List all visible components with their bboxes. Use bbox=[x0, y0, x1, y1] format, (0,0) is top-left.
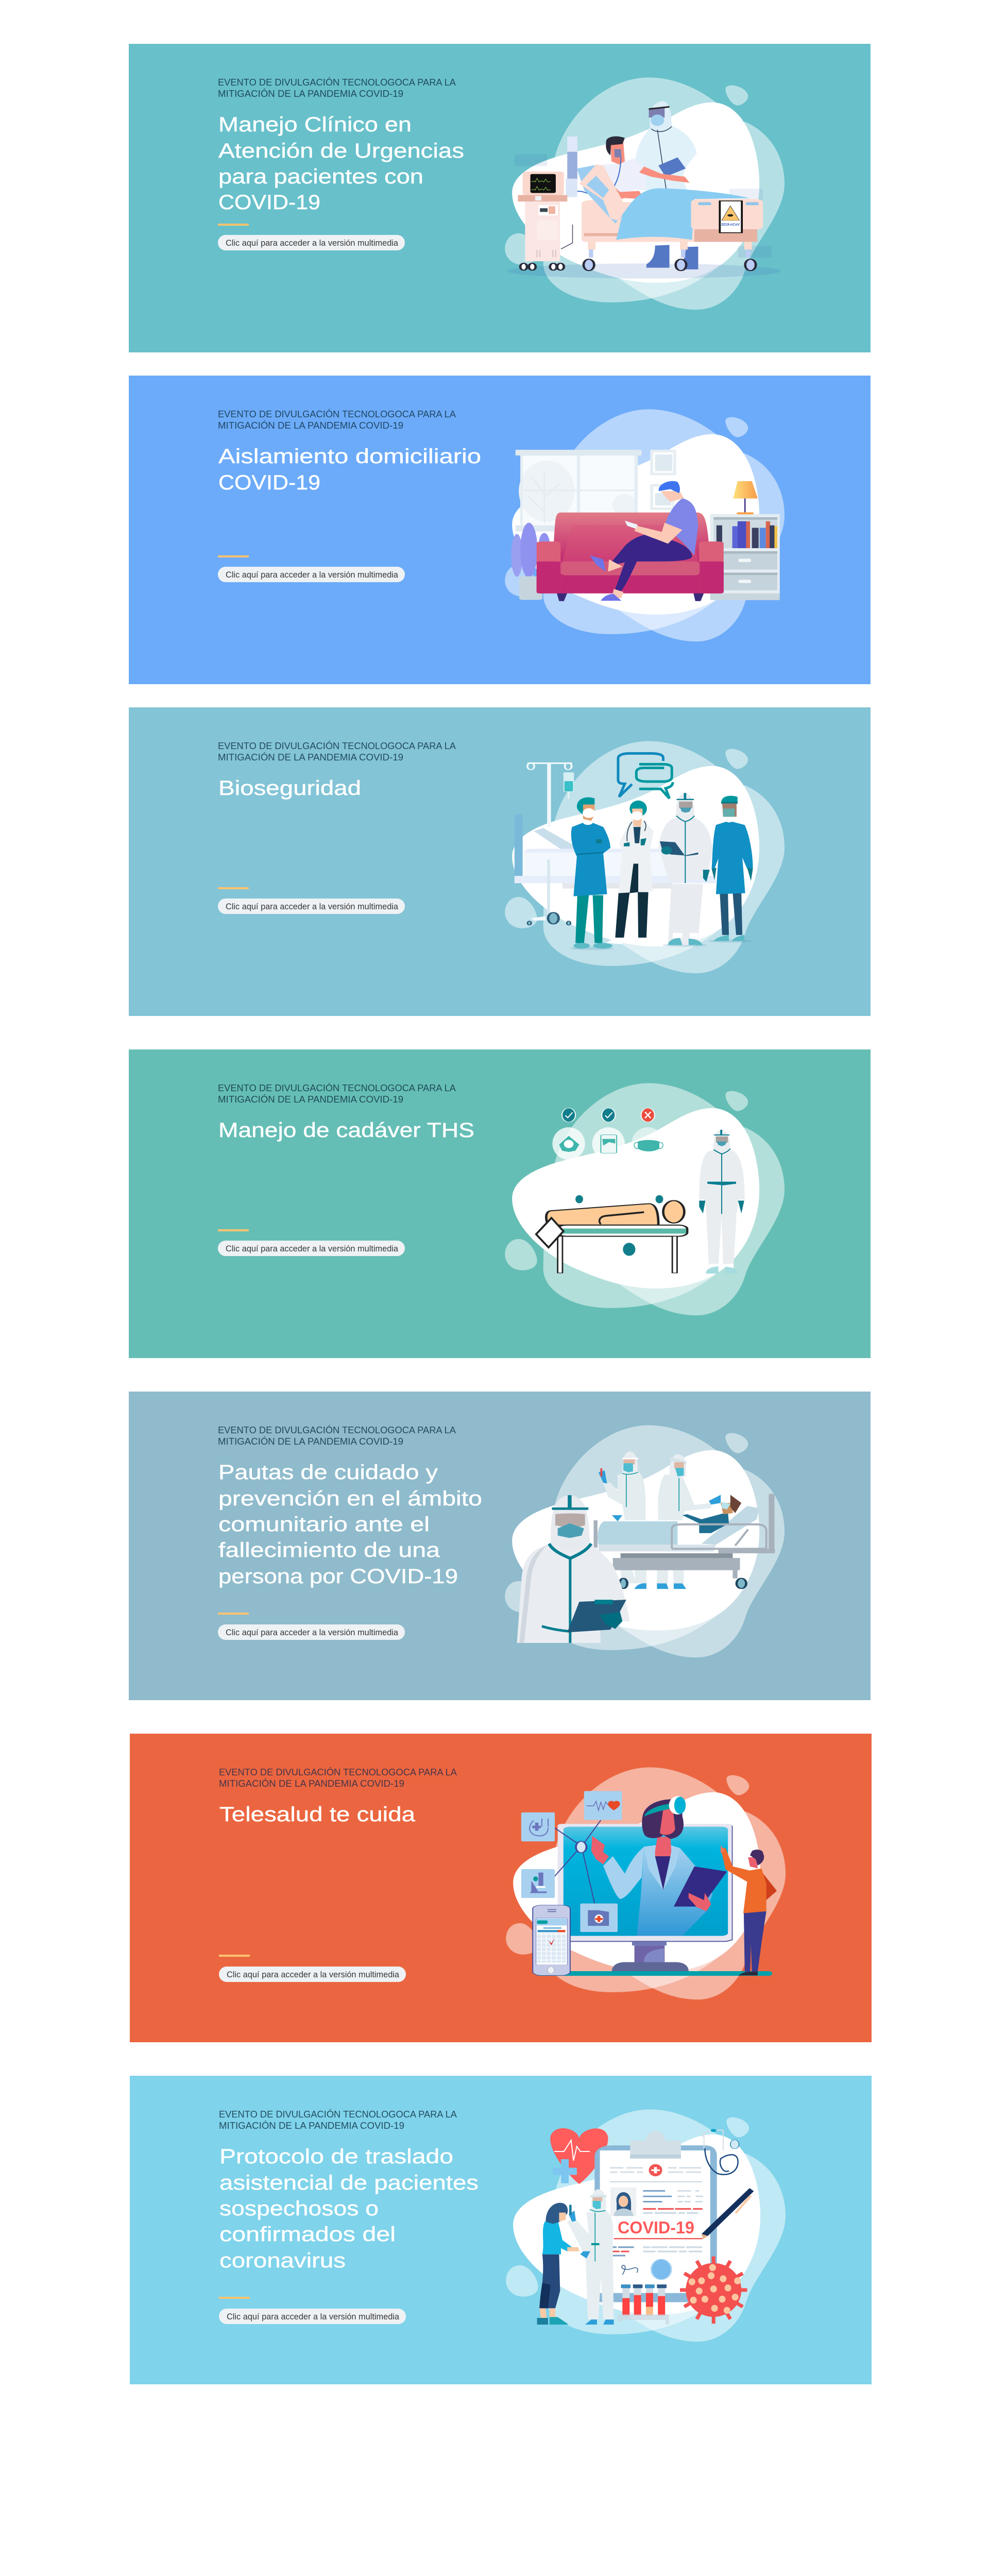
illustration: COVID-19 clipboard with patient and worker bbox=[537, 2128, 754, 2325]
tile: stethoscope bbox=[521, 1812, 555, 1841]
event caption: MITIGACIÓN DE LA PANDEMIA COVID-19 bbox=[219, 2120, 404, 2131]
accent line bbox=[218, 224, 249, 226]
tile: heart monitor bbox=[584, 1791, 622, 1820]
protection icons bbox=[552, 1108, 664, 1160]
event caption: MITIGACIÓN DE LA PANDEMIA COVID-19 bbox=[219, 1778, 404, 1789]
doctor in white coat bbox=[606, 801, 654, 944]
illustration: man reading on a sofa bbox=[511, 450, 780, 601]
background blobs bbox=[506, 2109, 786, 2342]
illustration: hazmat workers and patient on bed bbox=[517, 1451, 775, 1643]
panel: Pautas de cuidado bbox=[129, 1392, 871, 1700]
title: COVID-19 bbox=[218, 191, 320, 214]
bed and patient bbox=[593, 1494, 775, 1588]
title: Protocolo de traslado bbox=[219, 2145, 453, 2168]
title: Pautas de cuidado y bbox=[218, 1461, 438, 1484]
IV stand bbox=[527, 762, 574, 925]
panel background bbox=[129, 44, 871, 352]
clipboard COVID-19 label: COVID-19 bbox=[618, 2218, 694, 2237]
title: persona por COVID-19 bbox=[218, 1565, 458, 1588]
speech bubbles bbox=[618, 753, 673, 799]
heart bbox=[550, 2128, 608, 2184]
panel background bbox=[129, 707, 871, 1016]
button: Clic aquí para acceder a la versión multimedia bbox=[226, 1628, 399, 1637]
title: Manejo Clínico en bbox=[218, 113, 412, 136]
panel: Manejo Clínico bbox=[129, 44, 871, 352]
title: Aislamiento domiciliario bbox=[218, 445, 481, 468]
rear worker one bbox=[599, 1451, 645, 1521]
accent line bbox=[219, 2297, 250, 2299]
rear worker legs bbox=[620, 1569, 686, 1589]
hazmat worker bbox=[658, 793, 712, 945]
title: prevención en el ámbito bbox=[218, 1487, 482, 1510]
pen bbox=[702, 2188, 754, 2239]
event caption bbox=[219, 1767, 457, 1789]
illustration: patient in hospital bed with doctor bbox=[507, 101, 781, 279]
window bbox=[516, 450, 642, 532]
clipboard bbox=[594, 2131, 717, 2302]
tile: microscope bbox=[521, 1869, 555, 1898]
panel background bbox=[129, 1049, 871, 1358]
title bbox=[218, 113, 464, 214]
title: COVID-19 bbox=[218, 471, 320, 494]
background blobs bbox=[505, 409, 785, 641]
rear worker two bbox=[658, 1454, 721, 1520]
man bbox=[590, 481, 698, 601]
event caption: EVENTO DE DIVULGACIÓN TECNOLOGOCA PARA LA bbox=[218, 1082, 456, 1093]
virus particles bbox=[575, 1195, 663, 1256]
tile: folder bbox=[580, 1904, 618, 1932]
patient bbox=[572, 137, 690, 200]
button bbox=[218, 567, 405, 582]
title bbox=[219, 2145, 479, 2272]
accent line bbox=[218, 1613, 249, 1615]
illustration: telehealth doctor on monitor bbox=[521, 1791, 777, 1976]
body on table bbox=[536, 1200, 687, 1273]
button: Clic aquí para acceder a la versión multimedia bbox=[226, 1244, 399, 1253]
bed behind bbox=[515, 814, 716, 889]
accent line bbox=[218, 1229, 249, 1231]
event caption: EVENTO DE DIVULGACIÓN TECNOLOGOCA PARA LA bbox=[218, 77, 456, 88]
event caption: MITIGACIÓN DE LA PANDEMIA COVID-19 bbox=[218, 1094, 403, 1105]
button: Clic aquí para acceder a la versión multimedia bbox=[227, 2312, 400, 2321]
panel: Bioseguridad bbox=[129, 707, 871, 1016]
floor shadows bbox=[570, 939, 753, 950]
accent line bbox=[218, 887, 249, 889]
panel: Protocolo de traslado bbox=[130, 2076, 872, 2384]
stethoscope bbox=[703, 2129, 739, 2175]
title: Manejo de cadáver THS bbox=[218, 1119, 474, 1142]
event caption: MITIGACIÓN DE LA PANDEMIA COVID-19 bbox=[218, 420, 403, 431]
button: Clic aquí para acceder a la versión multimedia bbox=[226, 902, 399, 911]
illustration: four health workers bbox=[515, 753, 753, 950]
title: confirmados del bbox=[219, 2223, 396, 2246]
panel background bbox=[130, 2076, 872, 2384]
event caption bbox=[218, 77, 456, 99]
monitor bbox=[536, 1824, 772, 1976]
event caption bbox=[218, 1082, 456, 1105]
event caption: MITIGACIÓN DE LA PANDEMIA COVID-19 bbox=[218, 752, 403, 762]
background blobs bbox=[505, 1083, 785, 1315]
event caption: EVENTO DE DIVULGACIÓN TECNOLOGOCA PARA LA bbox=[218, 1425, 456, 1435]
front hazmat worker bbox=[517, 1495, 629, 1643]
title: fallecimiento de una bbox=[218, 1539, 440, 1562]
title: Bioseguridad bbox=[218, 777, 361, 800]
surgeon two bbox=[712, 796, 753, 941]
panel background bbox=[130, 1734, 872, 2042]
standing man bbox=[721, 1845, 777, 1975]
background blobs bbox=[505, 77, 785, 310]
protected worker bbox=[699, 1130, 745, 1274]
doctor on screen bbox=[591, 1796, 727, 1936]
panel: Manejo de cadáver bbox=[129, 1049, 871, 1358]
doctor bbox=[635, 101, 698, 269]
wall pictures bbox=[650, 450, 676, 510]
button: Clic aquí para acceder a la versión multimedia bbox=[226, 570, 399, 580]
lamp bbox=[733, 481, 758, 514]
title: Atención de Urgencias bbox=[218, 140, 464, 162]
button bbox=[218, 1241, 405, 1256]
title: asistencial de pacientes bbox=[219, 2172, 479, 2194]
surgeon one bbox=[571, 798, 612, 948]
illustration: body on table with protected worker bbox=[536, 1108, 745, 1274]
connector lines bbox=[554, 1820, 601, 1904]
background blobs bbox=[505, 741, 785, 973]
event caption bbox=[218, 1425, 456, 1447]
panel: Aislamiento domiciliario bbox=[129, 376, 871, 684]
background blobs bbox=[506, 1767, 786, 1999]
title: coronavirus bbox=[219, 2249, 346, 2272]
phone bbox=[533, 1905, 570, 1975]
button bbox=[219, 1967, 406, 1982]
event caption: EVENTO DE DIVULGACIÓN TECNOLOGOCA PARA LA bbox=[219, 1767, 457, 1777]
title: para pacientes con bbox=[218, 165, 423, 188]
virus bbox=[680, 2257, 747, 2324]
bed bbox=[577, 164, 763, 270]
button bbox=[219, 2309, 406, 2324]
title: Telesalud te cuida bbox=[219, 1803, 416, 1826]
event caption bbox=[219, 2109, 457, 2131]
event caption: MITIGACIÓN DE LA PANDEMIA COVID-19 bbox=[218, 1436, 403, 1447]
button: Clic aquí para acceder a la versión multimedia bbox=[226, 238, 399, 248]
title bbox=[218, 445, 481, 494]
event caption: MITIGACIÓN DE LA PANDEMIA COVID-19 bbox=[218, 88, 403, 99]
event caption: EVENTO DE DIVULGACIÓN TECNOLOGOCA PARA LA bbox=[218, 740, 456, 751]
panel background bbox=[129, 1392, 871, 1700]
ventilator bbox=[518, 137, 577, 270]
worker with thermometer bbox=[567, 2189, 614, 2325]
panel background bbox=[129, 376, 871, 684]
plant bbox=[511, 523, 550, 600]
title: comunitario ante el bbox=[218, 1513, 430, 1536]
panel: Telesalud bbox=[130, 1734, 872, 2042]
event caption: EVENTO DE DIVULGACIÓN TECNOLOGOCA PARA LA bbox=[218, 409, 456, 419]
event caption bbox=[218, 740, 456, 762]
event caption: EVENTO DE DIVULGACIÓN TECNOLOGOCA PARA LA bbox=[219, 2109, 457, 2120]
event caption bbox=[218, 409, 456, 431]
sign label: 2019-nCoV bbox=[721, 223, 740, 227]
accent line bbox=[219, 1955, 250, 1957]
test tubes bbox=[618, 2284, 669, 2325]
button bbox=[218, 1624, 405, 1640]
button: Clic aquí para acceder a la versión multimedia bbox=[227, 1970, 400, 1979]
title bbox=[218, 1461, 482, 1588]
woman patient bbox=[537, 2203, 579, 2325]
button bbox=[218, 235, 405, 250]
title: sospechosos o bbox=[219, 2197, 379, 2220]
nightstand bbox=[710, 514, 780, 600]
accent line bbox=[218, 555, 249, 557]
background blobs bbox=[505, 1425, 785, 1657]
sofa bbox=[537, 513, 724, 601]
button bbox=[218, 899, 405, 914]
